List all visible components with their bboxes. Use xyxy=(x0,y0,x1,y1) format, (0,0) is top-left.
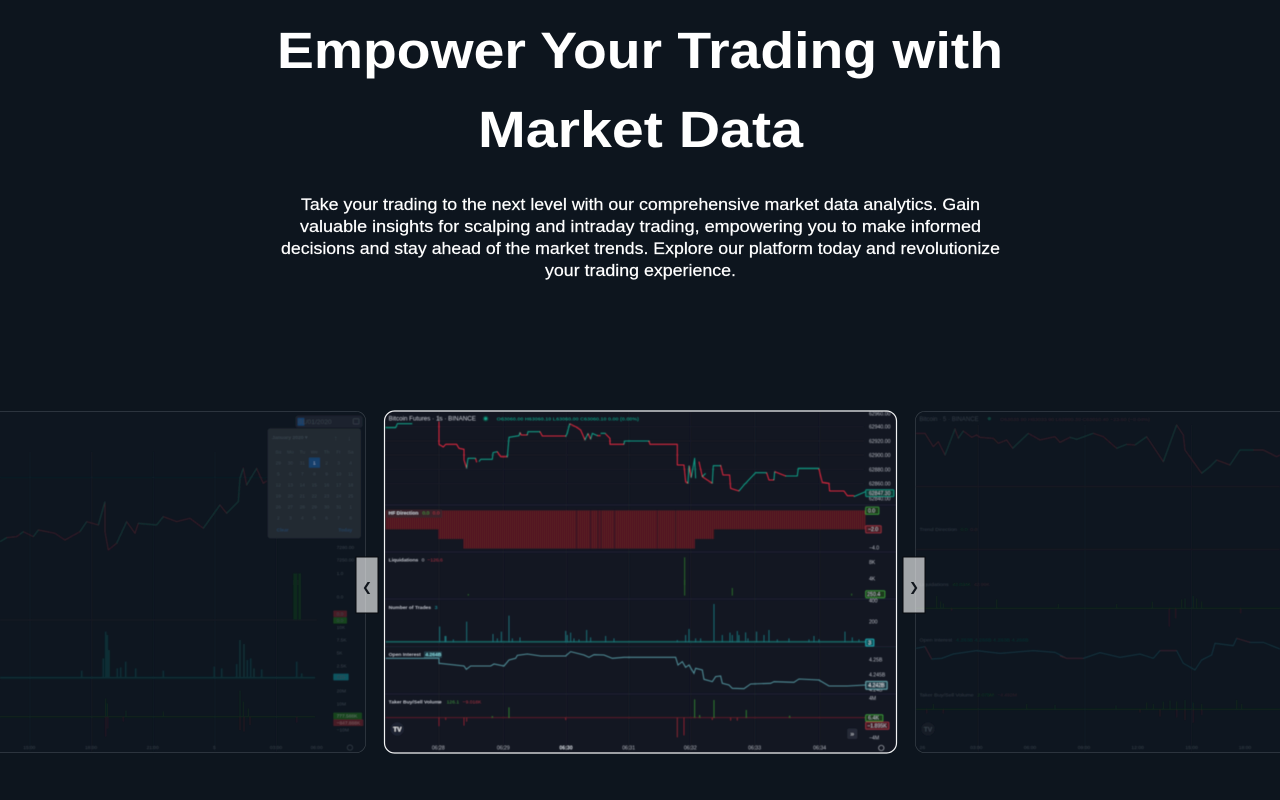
left lower chart panes: 06:00 xyxy=(311,745,323,751)
right lower panes: 12:00 xyxy=(1131,745,1144,751)
date input and calendar: 2 xyxy=(277,516,280,522)
icon: TradingView logo dimmed xyxy=(922,723,934,735)
date input and calendar: Sa xyxy=(348,449,354,455)
icon: TradingView logo xyxy=(391,722,404,736)
intro text block: your trading experience. xyxy=(545,262,736,280)
open interest line xyxy=(386,651,866,689)
right lower panes: Liquidations xyxy=(919,582,949,588)
axis labels: 06:32 xyxy=(684,746,697,752)
right lower panes: 09:00 xyxy=(1078,745,1090,751)
intro text block: Take your trading to the next level with our comprehensive market data analytics. Gain xyxy=(301,196,980,214)
arrow: previous slide button: ❮ xyxy=(362,580,372,594)
intro text block xyxy=(281,196,1000,280)
axis labels: 06:28 xyxy=(432,746,445,752)
right lower panes: 4.263B 4.266B 4.263B 4.266B xyxy=(956,637,1029,643)
right upper panes: Trend Direction xyxy=(919,527,957,533)
right lower panes: Taker Buy/Sell Volume xyxy=(919,693,974,699)
title xyxy=(277,22,1003,158)
date input and calendar: 3 xyxy=(289,516,292,522)
price axis labels: 62880.00 xyxy=(869,467,891,473)
date input and calendar: 12 xyxy=(276,483,281,489)
chart legend: O63060.00 H63060.10 L63060.00 C63060.10 0.00 (0.00%) xyxy=(497,416,639,422)
right upper panes: 0.0 xyxy=(970,527,977,533)
right lower panes: 43.034K xyxy=(952,582,972,588)
price axis labels xyxy=(866,412,894,582)
right lower panes xyxy=(916,582,1280,751)
date input and calendar: 3 xyxy=(337,460,340,466)
date input and calendar: 8 xyxy=(313,472,316,478)
price line chart xyxy=(386,422,866,497)
date input and calendar: 27 xyxy=(288,505,293,511)
axis labels: −4M xyxy=(869,735,879,741)
right lower panes: 15:00 xyxy=(1185,745,1198,751)
axis labels: 4.25B xyxy=(869,657,883,663)
price axis labels: 4K xyxy=(869,576,876,582)
liquidations bars xyxy=(468,580,852,596)
date input and calendar: 2 xyxy=(325,460,328,466)
left lower chart panes: 10K xyxy=(337,625,346,631)
price axis labels: −2.0 xyxy=(868,527,878,533)
panel: left dimmed chart slide xyxy=(0,411,366,753)
right upper panes: O63033.90 H63033.90 L62990.30 C63010.40 −23.60 (−0.04%) xyxy=(1000,417,1150,423)
axis labels: 6.4K xyxy=(868,716,879,722)
date input and calendar: 14 xyxy=(300,483,305,489)
panel: right dimmed chart slide xyxy=(915,411,1280,753)
price axis labels: 62840.00 xyxy=(869,497,891,503)
axis labels: 4.24B xyxy=(869,687,883,693)
date input and calendar: Su xyxy=(275,449,282,455)
right upper panes: 0.0 xyxy=(961,527,968,533)
right lower panes: 03:00 xyxy=(970,745,983,751)
left lower chart panes: 5K xyxy=(337,651,343,657)
date input and calendar: Today xyxy=(338,528,353,534)
date input and calendar: 13 xyxy=(288,483,293,489)
axis labels xyxy=(432,591,889,752)
icon: TradingView logo: TV xyxy=(393,726,402,733)
date input and calendar: 25 xyxy=(348,494,354,500)
date input and calendar: Tu xyxy=(300,449,305,455)
taker buy and sell volume: −9.018K xyxy=(463,699,482,705)
axis labels: 4.242B xyxy=(868,683,885,689)
date input and calendar: 24 xyxy=(336,494,342,500)
right lower panes: 2.075M xyxy=(977,693,994,699)
date input and calendar: 5 xyxy=(313,516,316,522)
date input and calendar: 26 xyxy=(276,505,281,511)
price axis labels: 62847.30 xyxy=(869,491,891,497)
date input and calendar: 4 xyxy=(349,460,352,466)
date input and calendar: ↑ xyxy=(334,435,337,442)
right lower panes: 42.99K xyxy=(974,582,990,588)
date input and calendar: 01/01/2020 xyxy=(298,419,332,426)
right lower panes: 06:00 xyxy=(1024,745,1036,751)
date input and calendar: 1 xyxy=(349,505,352,511)
open interest line: Open Interest xyxy=(389,652,421,658)
right upper panes xyxy=(916,416,1280,709)
HF direction histogram: 0.0 xyxy=(433,510,440,516)
central upper panes: −126.6 xyxy=(427,558,443,564)
chart legend xyxy=(389,416,639,423)
date input and calendar: 11 xyxy=(348,472,353,478)
date input and calendar: We xyxy=(311,449,318,455)
intro text block: decisions and stay ahead of the market trends. Explore our platform today and revolutionize xyxy=(281,240,1000,258)
date input and calendar: 7250.00 xyxy=(337,557,354,563)
HF direction histogram xyxy=(386,510,866,549)
title: Empower Your Trading with xyxy=(277,22,1003,79)
central lower panes xyxy=(384,580,897,752)
date input and calendar: Th xyxy=(324,449,330,455)
date input and calendar: 22 xyxy=(312,494,317,500)
taker buy and sell volume: Taker Buy/Sell Volume xyxy=(389,699,442,705)
axis labels: 200 xyxy=(869,619,878,625)
date input and calendar: 30 xyxy=(288,460,293,466)
date input and calendar: 8 xyxy=(349,516,352,522)
axis labels: 06:31 xyxy=(622,746,635,752)
date input and calendar xyxy=(268,416,363,585)
date input and calendar: 7 xyxy=(337,516,340,522)
price axis labels: 0.0 xyxy=(868,508,875,514)
date input and calendar: 6 xyxy=(289,472,292,478)
axis labels: 3 xyxy=(868,640,871,646)
open interest line: 4.264B xyxy=(425,652,442,658)
price axis labels: −4.0 xyxy=(869,546,879,552)
date input and calendar: 19 xyxy=(276,494,281,500)
number of trades histogram xyxy=(386,604,866,643)
left price chart xyxy=(0,467,277,718)
axis labels: 400 xyxy=(869,598,878,604)
HF direction histogram: HF Direction xyxy=(389,510,418,516)
date input and calendar: 1 xyxy=(313,460,316,466)
right lower panes: Open Interest xyxy=(919,637,953,643)
axis labels: 06:30 xyxy=(559,746,573,752)
left lower chart panes: 0.0 xyxy=(337,612,344,618)
taker buy and sell volume: 126.1 xyxy=(447,699,459,705)
left lower chart panes: 21:00 xyxy=(147,745,159,751)
left lower chart panes: −847.888K xyxy=(337,720,361,726)
date input and calendar: Mo xyxy=(287,449,294,455)
date input and calendar: Fr xyxy=(336,449,341,455)
taker buy and sell volume xyxy=(386,699,866,737)
arrow: previous slide button xyxy=(356,557,378,613)
date input and calendar: January 2020 ▾ xyxy=(272,435,308,441)
icon: scroll to latest button xyxy=(847,729,857,739)
date input and calendar: 5 xyxy=(277,472,280,478)
price axis labels: 62900.00 xyxy=(869,453,891,459)
central upper panes: 0 xyxy=(422,558,425,564)
date input and calendar: 17 xyxy=(336,483,342,489)
left lower chart panes: 2.5K xyxy=(337,664,347,670)
left lower chart panes xyxy=(0,580,363,751)
chart legend: Bitcoin Futures · 1s · BINANCE xyxy=(389,417,476,423)
left lower chart panes: 18:00 xyxy=(85,745,97,751)
date input and calendar: ↓ xyxy=(348,435,351,442)
left lower chart panes: 10M xyxy=(337,701,346,707)
date input and calendar: 7280.00 xyxy=(337,545,354,551)
left lower chart panes: 15:00 xyxy=(23,745,36,751)
date input and calendar: 18 xyxy=(348,483,354,489)
number of trades histogram: Number of Trades xyxy=(389,605,431,611)
central upper panes: Liquidations xyxy=(389,558,419,564)
icon: scroll to latest button: » xyxy=(850,731,854,738)
right lower panes: −4.492M xyxy=(997,693,1017,699)
left lower chart panes: 7.5K xyxy=(337,638,347,644)
date input and calendar: 23 xyxy=(324,494,330,500)
date input and calendar: Clear xyxy=(277,528,289,534)
axis labels: 4.245B xyxy=(869,672,886,678)
right upper panes: Bitcoin · 5 · BINANCE xyxy=(919,417,979,423)
right lower panes: 26 xyxy=(920,745,925,751)
date input and calendar: 21 xyxy=(300,494,305,500)
date input and calendar: 30 xyxy=(324,505,330,511)
left lower chart panes: 5 xyxy=(213,745,216,751)
date input and calendar: 29 xyxy=(276,460,281,466)
title: Market Data xyxy=(478,101,804,158)
axis labels: 250.4 xyxy=(867,592,880,598)
axis labels: 06:33 xyxy=(748,746,761,752)
left lower chart panes: 20M xyxy=(337,688,346,694)
left lower chart panes: 0.0 xyxy=(337,594,344,600)
price axis labels: 8K xyxy=(869,560,876,566)
arrow: next slide button xyxy=(903,557,925,613)
left lower chart panes: 0.0 xyxy=(337,618,344,624)
date input and calendar: 20 xyxy=(288,494,293,500)
date input and calendar: 4 xyxy=(301,516,304,522)
axis labels: 4M xyxy=(869,696,876,702)
HF direction histogram: 0.0 xyxy=(422,510,429,516)
price axis labels: 62920.00 xyxy=(869,439,891,445)
right lower panes: 18:00 xyxy=(1239,745,1251,751)
date input and calendar: 16 xyxy=(324,483,330,489)
intro text block: valuable insights for scalping and intraday trading, empowering you to make informed xyxy=(300,218,981,236)
left lower chart panes: 423 xyxy=(337,675,345,681)
axis labels: −1.895K xyxy=(867,723,887,729)
number of trades histogram: 3 xyxy=(435,605,438,611)
date input and calendar: 28 xyxy=(300,505,305,511)
date input and calendar: 31 xyxy=(336,505,342,511)
price axis labels: 62860.00 xyxy=(869,481,891,487)
date input and calendar: 29 xyxy=(312,505,317,511)
left lower chart panes: 03:00 xyxy=(270,745,282,751)
central slide border xyxy=(384,411,896,753)
date input and calendar: 6 xyxy=(325,516,328,522)
date input and calendar: 7 xyxy=(301,472,304,478)
arrow: next slide button: ❯ xyxy=(909,580,919,594)
date input and calendar: 1.0 xyxy=(337,571,344,577)
date input and calendar: 31 xyxy=(300,460,305,466)
date input and calendar: 15 xyxy=(312,483,317,489)
left lower chart panes: 777.588K xyxy=(337,714,358,720)
panel: central chart slide xyxy=(384,411,897,753)
price axis labels: 62940.00 xyxy=(869,425,891,431)
axis labels: 06:29 xyxy=(497,746,510,752)
left lower chart panes: −10M xyxy=(337,728,349,734)
central upper panes xyxy=(384,412,897,752)
date input and calendar: 10 xyxy=(336,472,342,478)
date input and calendar: 9 xyxy=(325,472,328,478)
price axis labels: 62960.00 xyxy=(869,412,891,418)
axis labels: 06:34 xyxy=(813,746,826,752)
icon: TradingView logo dimmed: TV xyxy=(924,726,933,733)
